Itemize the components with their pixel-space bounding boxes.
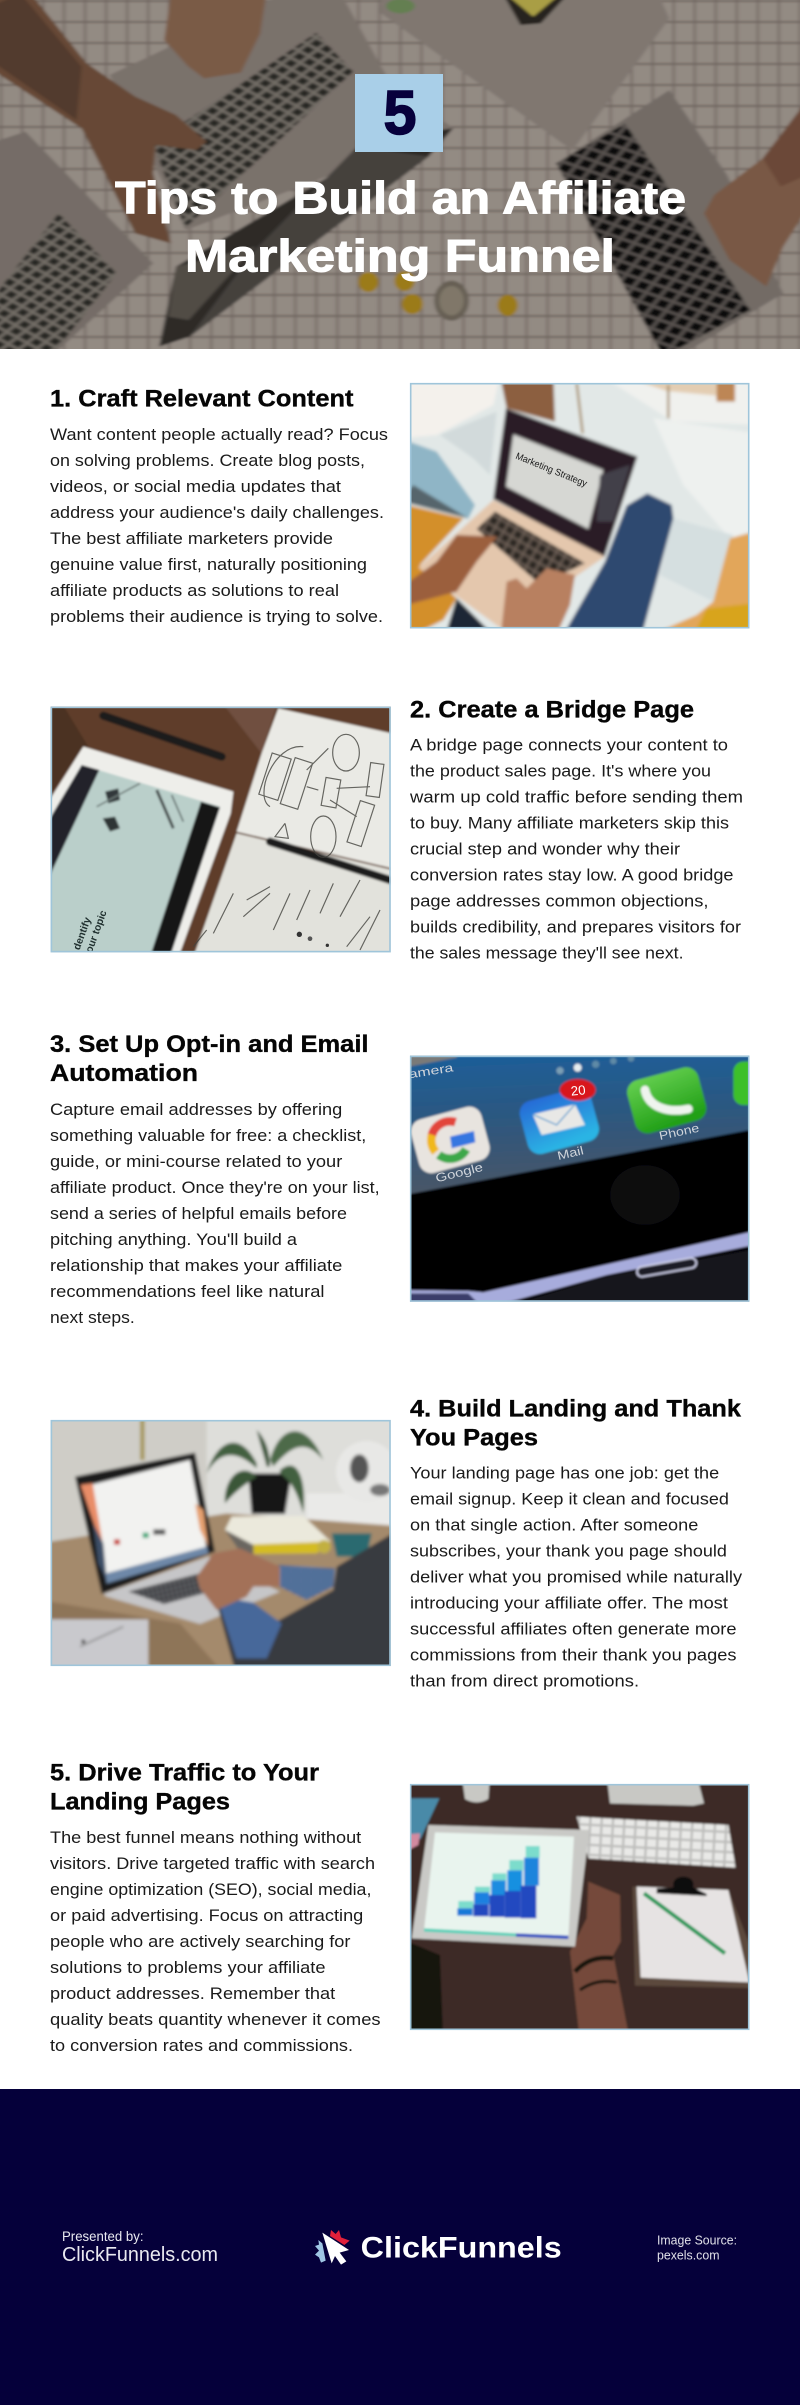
tip 4 body text: subscribes, your thank you page should <box>410 1542 727 1561</box>
tip 5 body text <box>50 1828 381 2055</box>
tip 3 body text: next steps. <box>50 1308 135 1327</box>
tip 2 body text: to buy. Many affiliate marketers skip this <box>410 814 729 832</box>
logo icon: cursor burst <box>315 2230 350 2265</box>
tip 5 heading: Landing Pages <box>50 1789 230 1816</box>
tip 1 body text: genuine value first, naturally positioning <box>50 555 367 574</box>
tip 2 body text: warm up cold traffic before sending them <box>409 788 743 806</box>
tip 4 panel <box>40 1396 743 1691</box>
tip 3 body text: send a series of helpful emails before <box>50 1204 347 1223</box>
tip 4 body text: deliver what you promised while naturally <box>410 1568 743 1587</box>
footer <box>0 2089 800 2405</box>
tip 4 body text: introducing your affiliate offer. The most <box>410 1594 728 1613</box>
tip 5 body text: engine optimization (SEO), social media, <box>50 1880 371 1899</box>
tip 1 body text <box>50 425 388 626</box>
title: Marketing Funnel <box>185 230 615 282</box>
tip 1 panel <box>50 375 767 642</box>
tip 1 body text: address your audience's daily challenges. <box>50 503 384 522</box>
tip 3 body text: Capture email addresses by offering <box>50 1100 342 1119</box>
hero photo: laptops on a tiled table <box>0 0 800 349</box>
tip 2 body text: A bridge page connects your content to <box>410 736 728 754</box>
tip 5 panel <box>50 1760 767 2055</box>
tip 2 body text: the product sales page. It's where you <box>410 762 711 780</box>
number badge <box>355 74 443 152</box>
tip 4 body text: on that single action. After someone <box>410 1516 698 1535</box>
presented by credit <box>62 2229 218 2266</box>
tip 4 heading <box>410 1396 742 1452</box>
tip 3 body text: affiliate product. Once they're on your list, <box>50 1178 380 1197</box>
tip 4 heading: 4. Build Landing and Thank <box>410 1396 742 1422</box>
tip 2 photo: tablet and sketched notebook: dentify <box>72 916 94 952</box>
tip 3 heading: 3. Set Up Opt-in and Email <box>50 1031 368 1058</box>
tip 4 body text: Your landing page has one job: get the <box>410 1464 719 1483</box>
title: Tips to Build an Affiliate <box>115 172 686 224</box>
tip 3 photo: phone home screen icons: amera <box>408 1060 455 1081</box>
tip 4 body text <box>410 1464 743 1691</box>
tip 5 heading <box>50 1760 319 1816</box>
tip 5 body text: The best funnel means nothing without <box>50 1828 361 1847</box>
tip 3 panel <box>50 1031 773 1327</box>
image source credit <box>657 2234 737 2262</box>
tip 5 body text: or paid advertising. Focus on attracting <box>50 1906 363 1925</box>
tip 3 photo: phone home screen icons: Phone <box>658 1121 701 1143</box>
logo wordmark: ClickFunnels <box>361 2232 562 2265</box>
tip 2 body text: crucial step and wonder why their <box>410 840 680 858</box>
ClickFunnels logo <box>315 2230 562 2265</box>
tip 2 panel <box>40 696 743 967</box>
tip 5 body text: product addresses. Remember that <box>50 1984 335 2003</box>
tip 3 heading <box>50 1031 368 1087</box>
tip 2 body text: builds credibility, and prepares visitors for <box>410 918 741 936</box>
tip 5 body text: people who are actively searching for <box>50 1932 351 1951</box>
tip 1 body text: The best affiliate marketers provide <box>50 529 333 548</box>
tip 3 photo: phone home screen icons: Google <box>434 1160 485 1185</box>
title <box>115 172 686 282</box>
tip 1 body text: Want content people actually read? Focus <box>50 425 388 444</box>
tip 5 body text: quality beats quantity whenever it comes <box>50 2010 381 2029</box>
number badge: 5 <box>384 79 416 148</box>
tip 4 body text: commissions from their thank you pages <box>410 1646 736 1665</box>
tip 2 body text <box>409 736 743 962</box>
tip 3 photo: phone home screen icons <box>400 1045 773 1312</box>
tip 2 body text: conversion rates stay low. A good bridge <box>410 866 734 884</box>
tip 5 photo: tablet with bar chart on a desk <box>400 1775 767 2042</box>
tip 5 heading: 5. Drive Traffic to Your <box>50 1760 319 1787</box>
tip 3 body text <box>50 1100 380 1327</box>
tip 3 body text: relationship that makes your affiliate <box>50 1256 342 1275</box>
tip 2 body text: page addresses common objections, <box>410 892 708 910</box>
hero banner <box>0 0 800 360</box>
tip 3 body text: pitching anything. You'll build a <box>50 1230 298 1249</box>
tip 1 photo: laptop showing marketing strategy <box>400 375 767 642</box>
tip 2 heading: 2. Create a Bridge Page <box>410 696 694 724</box>
tip 5 body text: visitors. Drive targeted traffic with search <box>50 1854 375 1873</box>
tip 4 body text: successful affiliates often generate more <box>410 1620 736 1639</box>
presented by credit: Presented by: <box>62 2229 144 2244</box>
tip 3 photo: phone home screen icons: Mail <box>556 1143 585 1163</box>
tip 1 photo: laptop showing marketing strategy: Marketing Strategy <box>514 451 589 490</box>
tip 3 body text: recommendations feel like natural <box>50 1282 324 1301</box>
tip 5 body text: solutions to problems your affiliate <box>50 1958 326 1977</box>
tip 3 heading: Automation <box>50 1060 198 1087</box>
tip 1 body text: on solving problems. Create blog posts, <box>50 451 365 470</box>
tip 4 heading: You Pages <box>410 1424 538 1452</box>
tip 1 heading: 1. Craft Relevant Content <box>50 386 354 412</box>
tip 3 body text: something valuable for free: a checklist, <box>50 1126 366 1145</box>
presented by credit: ClickFunnels.com <box>62 2244 218 2266</box>
tip 2 photo: tablet and sketched notebook <box>40 700 407 967</box>
tip 1 body text: videos, or social media updates that <box>50 477 341 496</box>
tip 2 body text: the sales message they'll see next. <box>410 944 684 962</box>
tip 2 photo: tablet and sketched notebook: our topic <box>84 909 110 954</box>
tip 4 body text: than from direct promotions. <box>410 1672 639 1691</box>
image source credit: pexels.com <box>657 2248 720 2262</box>
tip 5 body text: to conversion rates and commissions. <box>50 2036 353 2055</box>
tip 1 body text: affiliate products as solutions to real <box>50 581 339 600</box>
image source credit: Image Source: <box>657 2234 737 2248</box>
tip 1 body text: problems their audience is trying to solve. <box>50 607 383 626</box>
tip 3 body text: guide, or mini-course related to your <box>50 1152 343 1171</box>
tip 4 photo: person typing on a laptop <box>40 1410 407 1677</box>
tip 4 body text: email signup. Keep it clean and focused <box>410 1490 729 1509</box>
tip 3 photo: phone home screen icons: 20 <box>570 1082 586 1099</box>
